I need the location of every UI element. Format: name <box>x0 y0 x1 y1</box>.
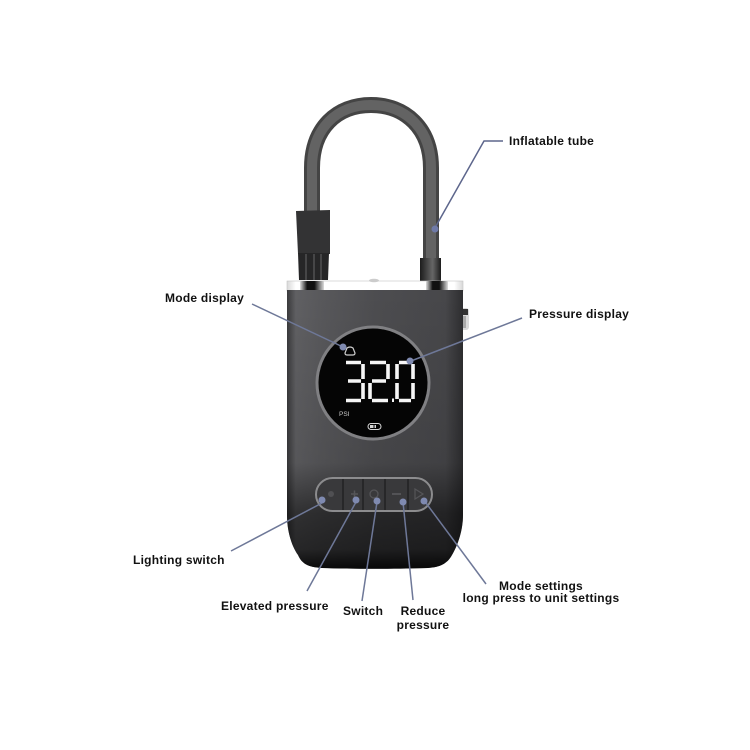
display <box>316 326 430 440</box>
callout: mode display <box>165 291 346 350</box>
callout: reduce pressure <box>397 498 449 632</box>
button panel <box>316 478 432 511</box>
callout: inflatable tube: Inflatable tube <box>509 134 594 148</box>
callout: elevated pressure <box>221 496 360 613</box>
battery icon <box>368 424 381 430</box>
callout: mode settings: Mode settings <box>499 579 583 593</box>
callout: reduce pressure: pressure <box>397 618 449 632</box>
callout: lighting switch: Lighting switch <box>133 553 225 567</box>
callout: mode settings: long press to unit settings <box>463 591 619 605</box>
callout: mode settings <box>420 498 619 605</box>
callout: switch: Switch <box>343 604 383 618</box>
callout: elevated pressure: Elevated pressure <box>221 599 329 613</box>
side valve <box>460 308 469 330</box>
callout: reduce pressure: Reduce <box>401 604 445 618</box>
callout: switch <box>343 498 383 618</box>
device body <box>287 290 463 569</box>
callout: lighting switch <box>133 496 326 567</box>
mode car icon <box>345 347 355 355</box>
inflatable tube hose <box>312 105 431 262</box>
top plate <box>287 279 463 291</box>
PSI label: PSI <box>339 411 350 418</box>
callout: mode display: Mode display <box>165 291 244 305</box>
callout: pressure display <box>406 307 629 364</box>
callout: pressure display: Pressure display <box>529 307 629 321</box>
digits 32.0 <box>346 362 413 402</box>
left hose connector <box>296 210 330 280</box>
right hose collar <box>420 258 441 282</box>
callout: inflatable tube <box>432 134 594 232</box>
